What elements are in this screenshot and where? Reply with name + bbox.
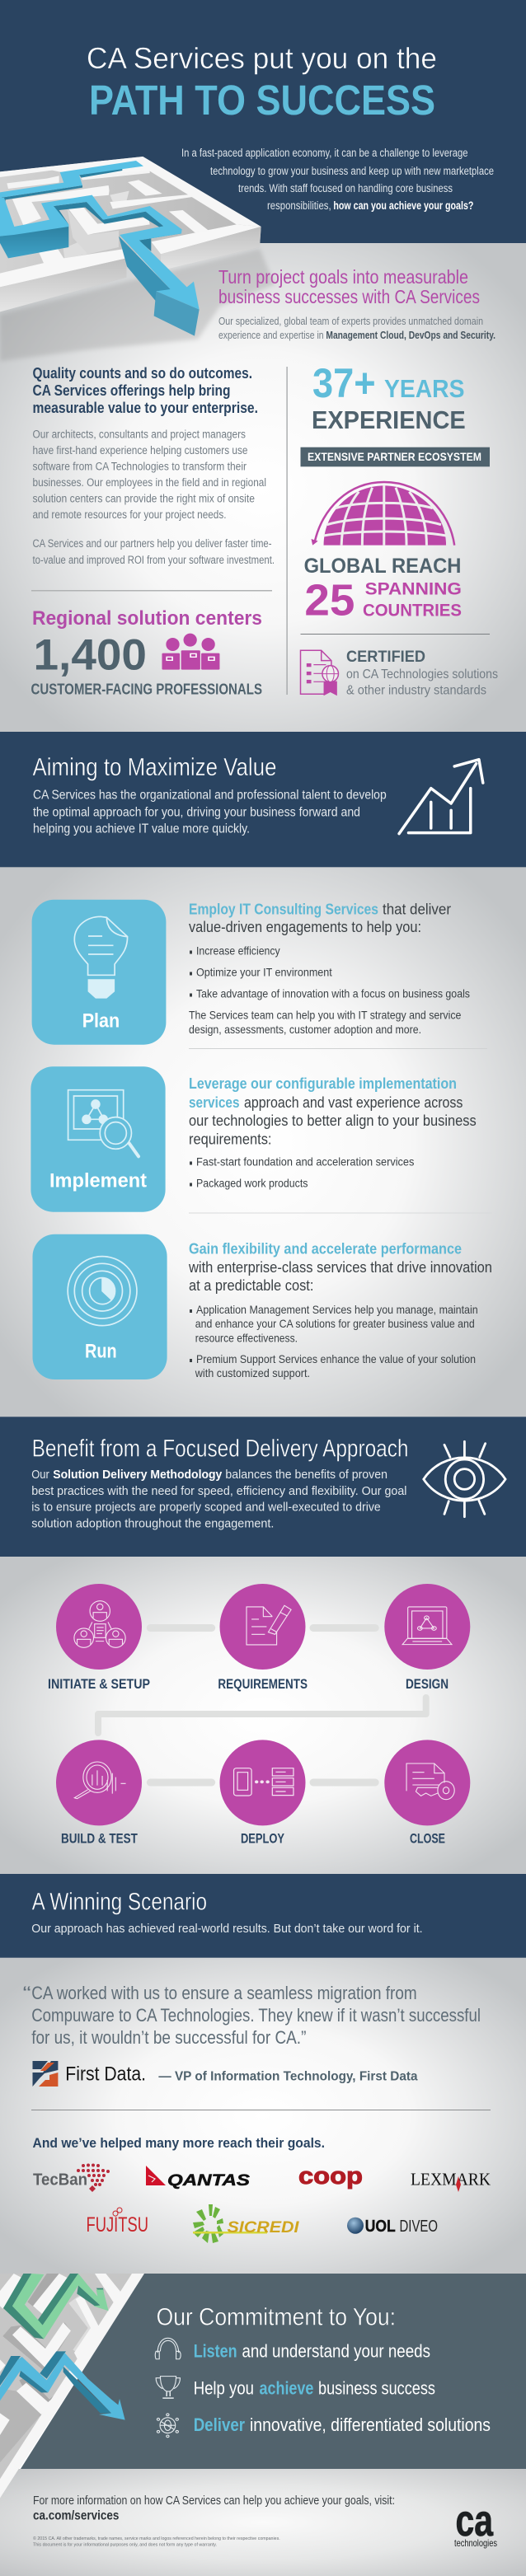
stat: global reach: GLOBAL REACH — [304, 555, 461, 578]
step: initiate and setup: INITIATE & SETUP — [48, 1676, 150, 1692]
logo: tecban — [33, 2164, 110, 2192]
title: PATH TO SUCCESS — [89, 77, 435, 124]
text: implement details: approach and vast experience across — [244, 1094, 463, 1111]
intro text: responsibilities, — [267, 199, 331, 212]
logo: uol diveo: DIVEO — [399, 2218, 438, 2236]
text: architects paragraph: to-value and improved ROI from your software investment. — [33, 554, 275, 566]
connectors — [98, 1624, 426, 1787]
step: deploy: DEPLOY — [241, 1831, 284, 1847]
text: plan details: value-driven engagements to help you: — [189, 919, 421, 935]
panel: our commitment to you — [0, 2274, 526, 2499]
stat: global reach: COUNTRIES — [363, 602, 462, 621]
row: achieve — [156, 2377, 435, 2399]
row: deliver: innovative, differentiated solutions — [250, 2414, 491, 2435]
text: specialized team — [218, 316, 495, 341]
panel: hero header — [0, 0, 526, 243]
text: implement details — [189, 1075, 477, 1190]
logo: coop: coop — [298, 2163, 363, 2190]
stat: 37+ years experience: YEARS — [384, 374, 465, 403]
process flow: solution delivery methodology — [48, 1584, 470, 1847]
text: run details — [188, 1241, 492, 1379]
text block — [33, 788, 387, 836]
text: plan details: that deliver — [383, 901, 451, 917]
row: achieve: achieve — [259, 2378, 313, 2399]
text: specialized team: Our specialized, global team of experts provides unmatched domain — [218, 316, 483, 327]
text: run details: at a predictable cost: — [189, 1277, 313, 1294]
logo: first data and attribution — [33, 2061, 418, 2087]
card: implement: Implement — [49, 1170, 147, 1192]
text: run details: and enhance your CA solutions for greater business value and — [195, 1317, 475, 1330]
text: Our approach has achieved real-world results. But don’t take our word for it. — [31, 1922, 423, 1936]
logo: tecban: TecBan — [33, 2171, 87, 2190]
text: plan details: Optimize your IT environment — [196, 966, 332, 979]
text block: Solution Delivery Methodology — [53, 1468, 223, 1482]
heading: A Winning Scenario — [32, 1889, 207, 1916]
step: initiate and setup — [48, 1584, 150, 1692]
card: plan — [32, 900, 166, 1045]
heading: quality counts — [33, 365, 258, 416]
step: design — [384, 1584, 470, 1692]
text: run details: with enterprise-class services that drive innovation — [188, 1259, 492, 1276]
text: architects paragraph: Our architects, consultants and project managers — [33, 428, 246, 440]
row: achieve: business success — [318, 2378, 435, 2399]
quote: for us, it wouldn’t be successful for CA.” — [31, 2027, 306, 2048]
logo: sicredi — [193, 2204, 299, 2243]
heading: quality counts: measurable value to your enterprise. — [33, 400, 258, 416]
text: implement details: our technologies to better align to your business — [189, 1112, 477, 1129]
text: run details: Gain flexibility and accelerate performance — [189, 1241, 462, 1258]
row: achieve: Help you — [194, 2378, 254, 2399]
heading: Our Commitment to You: — [157, 2303, 396, 2330]
panel: focused delivery approach — [0, 1417, 526, 1557]
stat: regional solution centers: Regional solution centers — [32, 607, 262, 630]
icon: globe — [312, 482, 454, 546]
row: listen — [155, 2338, 430, 2361]
text: fine print: © 2015 CA. All other trademarks, trade names, service marks and logos referenced herein belong to their respective companies. — [33, 2536, 280, 2541]
heading: helped many more: And we’ve helped many more reach their goals. — [33, 2135, 325, 2151]
text block: balances the benefits of proven — [225, 1468, 387, 1482]
text: run details: with customized support. — [195, 1366, 310, 1379]
stat: certified — [346, 649, 498, 698]
step: requirements: REQUIREMENTS — [218, 1676, 308, 1692]
text: architects paragraph: and remote resources for your project needs. — [33, 508, 226, 521]
text: specialized team: experience and expertise in — [218, 330, 324, 341]
text block: is to ensure projects are properly scoped and well-executed to drive — [31, 1500, 381, 1514]
icon: laptop — [402, 1607, 452, 1645]
icon: growth chart — [399, 760, 483, 834]
panel: quality counts — [31, 365, 275, 698]
text: implement details: requirements: — [189, 1131, 272, 1147]
step: build and test: BUILD & TEST — [61, 1831, 138, 1847]
heading: quality counts: Quality counts and so do outcomes. — [33, 365, 252, 382]
icon: light bulb — [74, 916, 128, 999]
icon: document and key — [406, 1763, 454, 1800]
badge: extensive partner ecosystem — [300, 447, 490, 466]
row: deliver — [157, 2414, 491, 2438]
title: CA Services put you on the — [87, 41, 437, 75]
text block: best practices with the need for speed, efficiency and flexibility. Our goal — [31, 1484, 406, 1498]
quote: CA worked with us to ensure a seamless migration from — [31, 1983, 417, 2003]
logo: lexmark: LEXMARK — [411, 2170, 491, 2190]
text: more information: For more information on how CA Services can help you achieve your goals, visit: — [33, 2494, 395, 2508]
heading: Benefit from a Focused Delivery Approach — [32, 1435, 408, 1462]
logo: ca technologies: ca — [455, 2496, 494, 2546]
badge: extensive partner ecosystem: EXTENSIVE PARTNER ECOSYSTEM — [308, 450, 481, 463]
heading: Aiming to Maximize Value — [33, 752, 277, 781]
text: plan details: Increase efficiency — [196, 944, 280, 958]
intro text: In a fast-paced application economy, it can be a challenge to leverage — [181, 147, 468, 159]
row: listen: Listen — [194, 2340, 237, 2361]
panel: a winning scenario — [0, 1874, 526, 1958]
icon: document and pencil — [247, 1605, 291, 1645]
stat: certified: & other industry standards — [346, 684, 486, 698]
logo: sicredi: SICREDI — [228, 2219, 299, 2236]
customer logos — [33, 2163, 491, 2243]
text: run details: Application Management Services help you manage, maintain — [196, 1303, 478, 1316]
text: architects paragraph: have first-hand experience helping customers use — [33, 444, 247, 457]
icon: first data mark — [33, 2061, 58, 2087]
step: requirements — [218, 1584, 308, 1692]
stat: 37+ years experience: EXPERIENCE — [312, 405, 466, 434]
icon: concentric clock — [68, 1257, 137, 1326]
card: implement — [31, 1066, 166, 1212]
logo: uol diveo — [347, 2218, 438, 2236]
text: plan details: design, assessments, customer adoption and more. — [189, 1023, 421, 1036]
card: run: Run — [85, 1340, 117, 1362]
heading: turn project goals: business successes with CA Services — [218, 286, 480, 307]
intro text: trends. With staff focused on handling core business — [238, 182, 453, 194]
icon: eye — [424, 1441, 505, 1517]
heading: turn project goals: Turn project goals into measurable — [218, 266, 468, 288]
illustration: maze with arrows — [0, 2274, 144, 2499]
stat: global reach: 25 — [304, 576, 355, 625]
text: implement details: Packaged work products — [196, 1177, 308, 1190]
text block — [31, 1468, 406, 1530]
step: close — [384, 1740, 470, 1847]
stat: 37+ years experience: 37+ — [312, 360, 376, 406]
text: architects paragraph — [33, 428, 275, 566]
icon: people — [162, 634, 219, 670]
icon: magnifier over diagram — [68, 1090, 139, 1156]
illustration: maze with blue path — [0, 157, 275, 361]
text: fine print — [33, 2536, 280, 2548]
row: listen: and understand your needs — [242, 2340, 430, 2361]
text: run details: resource effectiveness. — [195, 1331, 298, 1344]
stat: global reach: SPANNING — [365, 580, 462, 599]
text: architects paragraph: solution centers can provide the right mix of onsite — [33, 492, 255, 504]
stat: certified: CERTIFIED — [346, 649, 425, 666]
title — [87, 41, 437, 124]
panel: company stats — [300, 360, 498, 698]
logo: ca technologies: technologies — [454, 2537, 497, 2549]
text: more information — [33, 2494, 395, 2523]
logo: fujitsu — [86, 2208, 148, 2236]
icon: hub — [157, 2414, 178, 2438]
text: run details: Premium Support Services enhance the value of your solution — [196, 1352, 476, 1365]
stat: regional solution centers: 1,400 — [33, 631, 147, 680]
row: deliver: Deliver — [194, 2414, 245, 2435]
logo: first data and attribution: First Data. — [65, 2063, 146, 2085]
card: plan: Plan — [82, 1010, 120, 1033]
text block: the optimal approach for you, driving your business forward and — [33, 805, 360, 819]
text: fine print: This document is for your informational purposes only, and does not form any type of warranty. — [33, 2543, 217, 2548]
stat: certified: on CA Technologies solutions — [346, 667, 498, 681]
stat: 37+ years experience — [312, 360, 466, 434]
text: architects paragraph: businesses. Our employees in the field and in regional — [33, 476, 266, 489]
text: architects paragraph: CA Services and our partners help you deliver faster time- — [33, 537, 272, 550]
text: plan details: The Services team can help you with IT strategy and service — [189, 1009, 462, 1022]
icon: team — [74, 1601, 125, 1647]
step: build and test — [56, 1740, 142, 1847]
text: plan details — [189, 901, 470, 1036]
text block: solution adoption throughout the engagement. — [31, 1516, 274, 1530]
logo: qantas — [146, 2166, 250, 2190]
footer — [33, 2494, 497, 2549]
logo: qantas: QANTAS — [167, 2172, 250, 2190]
quote: “ — [23, 1983, 31, 2003]
stat: global reach — [304, 555, 462, 625]
text: plan details: Employ IT Consulting Services — [189, 901, 378, 917]
panel: aiming to maximize value — [0, 732, 526, 867]
logo: first data and attribution: — VP of Information Technology, First Data — [158, 2069, 418, 2083]
step: deploy — [219, 1740, 305, 1847]
logo: uol diveo: UOL — [365, 2218, 396, 2236]
heading: turn project goals — [218, 266, 480, 307]
text block: CA Services has the organizational and professional talent to develop — [33, 788, 387, 802]
stat: regional solution centers: CUSTOMER-FACING PROFESSIONALS — [31, 681, 262, 698]
step: design: DESIGN — [406, 1676, 449, 1692]
quote — [23, 1983, 481, 2048]
text block: Our — [31, 1468, 49, 1482]
intro text: how can you achieve your goals? — [333, 199, 473, 212]
step: close: CLOSE — [410, 1831, 445, 1847]
icon: trophy — [156, 2377, 180, 2398]
icon: phone to servers — [234, 1768, 294, 1796]
stat: regional solution centers — [31, 607, 262, 698]
card: run — [33, 1234, 167, 1379]
text: implement details: services — [189, 1094, 239, 1111]
logo: fujitsu: FUJITSU — [86, 2213, 148, 2236]
text block: helping you achieve IT value more quickly. — [33, 822, 250, 836]
text: architects paragraph: software from CA Technologies to transform their — [33, 460, 247, 472]
text: implement details: Fast-start foundation and acceleration services — [196, 1155, 414, 1169]
icon: certificate — [300, 650, 338, 696]
intro text — [181, 147, 494, 212]
text: plan details: Take advantage of innovation with a focus on business goals — [196, 987, 470, 1000]
heading: quality counts: CA Services offerings help bring — [33, 382, 231, 399]
text: implement details: Leverage our configurable implementation — [189, 1075, 457, 1092]
icon: magnifier analysis — [74, 1762, 126, 1799]
text: more information: ca.com/services — [33, 2509, 119, 2523]
icon: headphones — [155, 2338, 181, 2359]
